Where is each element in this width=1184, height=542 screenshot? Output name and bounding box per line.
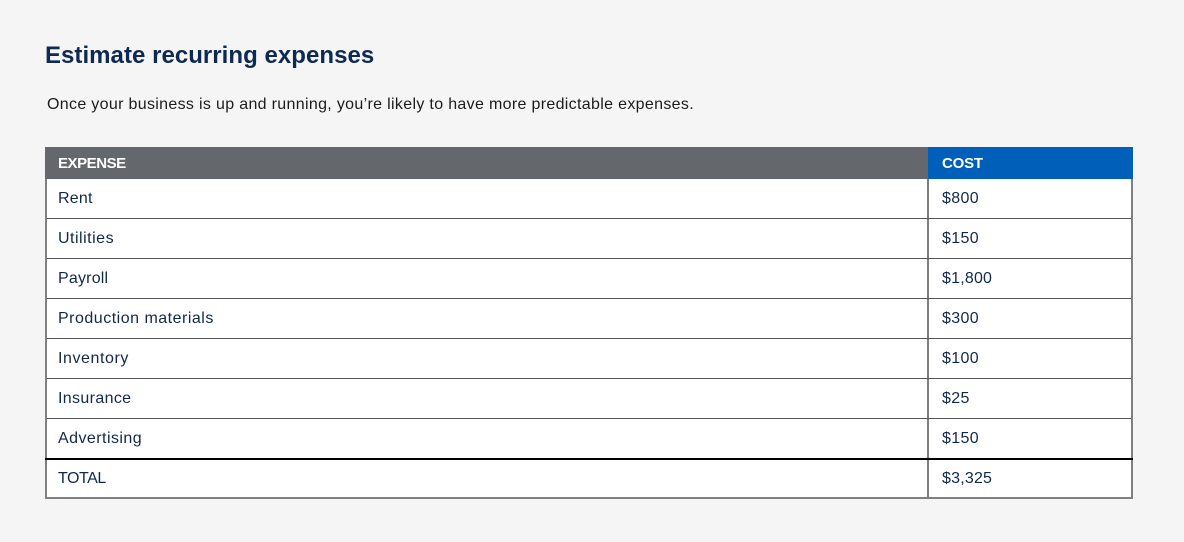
header: cost	[928, 147, 1133, 179]
cost: advertising: $150	[942, 430, 979, 447]
row: payroll: Payroll	[58, 270, 108, 287]
cost: payroll: $1,800	[942, 270, 992, 287]
header: cost: COST	[942, 155, 983, 172]
row: advertising: Advertising	[58, 430, 142, 447]
row: total: TOTAL	[58, 470, 106, 487]
header: expense	[45, 147, 928, 179]
row separators	[47, 218, 1131, 498]
expense table	[45, 147, 1133, 499]
header: expense: EXPENSE	[58, 155, 126, 172]
cost: inventory: $100	[942, 350, 979, 367]
cost: rent: $800	[942, 190, 979, 207]
total separator	[45, 458, 1133, 460]
row: utilities: Utilities	[58, 230, 114, 247]
row: rent: Rent	[58, 190, 93, 207]
table body background	[45, 179, 1133, 499]
intro text: Once your business is up and running, you’re likely to have more predictable expenses.	[47, 96, 694, 113]
row: production materials: Production materials	[58, 310, 214, 327]
cost: utilities: $150	[942, 230, 979, 247]
column divider	[927, 179, 929, 499]
cost: production materials: $300	[942, 310, 979, 327]
title: Estimate recurring expenses	[45, 42, 374, 69]
row: insurance: Insurance	[58, 390, 131, 407]
cost: insurance: $25	[942, 390, 970, 407]
cost: total: $3,325	[942, 470, 992, 487]
row: inventory: Inventory	[58, 350, 129, 367]
